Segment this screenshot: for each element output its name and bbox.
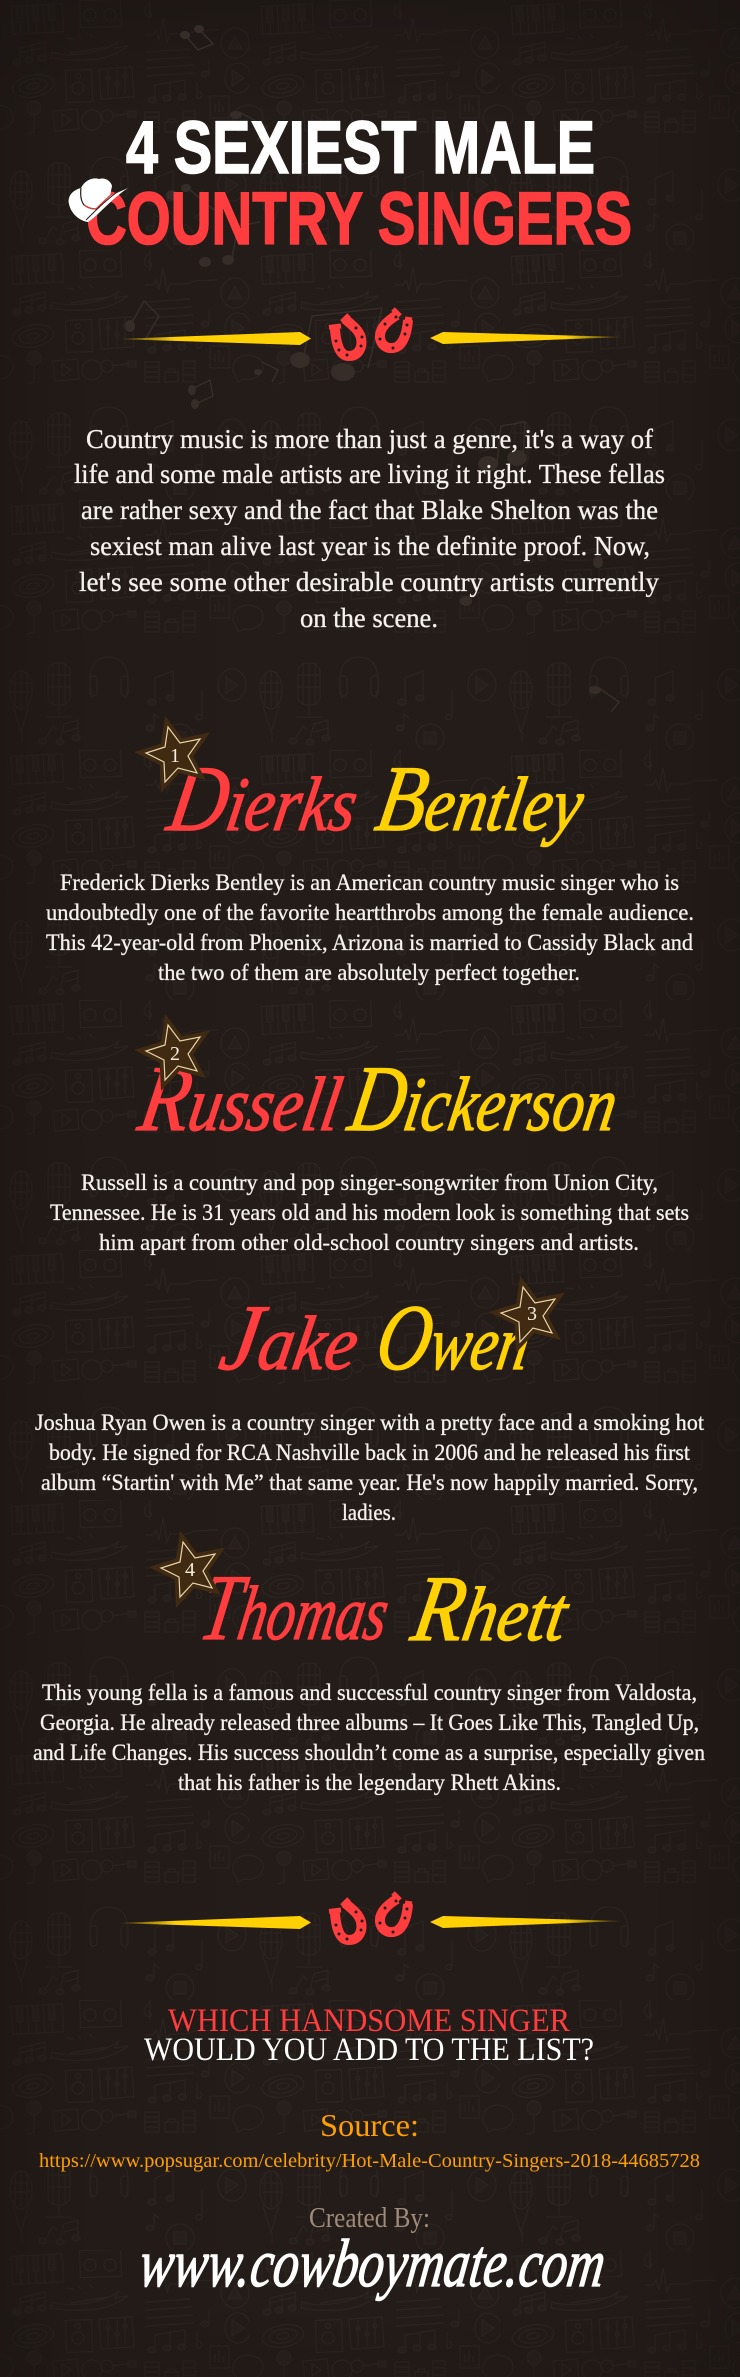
closing question: WOULD YOU ADD TO THE LIST? [144,2032,594,2068]
description: undoubtedly one of the favorite heartthrobs among the female audience. [46,900,694,925]
star badge 1: 1 [170,745,180,767]
created by label: Created By: [309,2202,430,2234]
description: the two of them are absolutely perfect together. [158,960,580,985]
intro paragraph: life and some male artists are living it right. These fellas [74,459,665,489]
star badge 3: 3 [527,1303,537,1325]
closing question [144,2003,594,2068]
panel: singer 1 Dierks Bentley [46,727,694,985]
description: body. He signed for RCA Nashville back in 2006 and he released his first [49,1440,691,1465]
star badge 4 [161,1542,215,1597]
icon: right horseshoe [378,309,412,350]
description [46,870,694,985]
floating faded music notes [125,25,619,712]
name: Russell Dickerson [131,1048,627,1151]
description: Joshua Ryan Owen is a country singer with a pretty face and a smoking hot [35,1410,705,1435]
name: Dierks Bentley: Dierks [160,748,367,851]
name: Jake Owen [213,1287,540,1390]
credit [135,2202,611,2301]
title [69,106,632,260]
right gold blade [430,332,623,344]
panel: singer 3 Jake Owen [35,1287,705,1525]
panel: singer 4 Thomas Rhett [33,1542,705,1795]
icon: cowboy hat [69,178,128,222]
star badge 2: 2 [170,1043,180,1065]
source [39,2107,700,2172]
closing question: WHICH HANDSOME SINGER [168,2003,570,2039]
description: album “Startin' with Me” that same year. He's now happily married. Sorry, [41,1470,698,1495]
divider: top horseshoes and gold blades [117,309,623,356]
description: that his father is the legendary Rhett Akins. [178,1770,561,1795]
name: Thomas Rhett: Rhett [404,1558,579,1661]
intro paragraph: sexiest man alive last year is the definite proof. Now, [90,531,650,561]
icon: left horseshoe [329,315,364,356]
name: Russell Dickerson: Russell [131,1048,351,1151]
description [50,1170,689,1255]
description: This 42-year-old from Phoenix, Arizona is married to Cassidy Black and [46,930,693,955]
name: Russell Dickerson: Dickerson [341,1048,627,1151]
description: Frederick Dierks Bentley is an American country music singer who is [60,870,679,895]
star badge 2 [146,1025,200,1080]
description: ladies. [342,1500,396,1525]
description [35,1410,705,1525]
intro paragraph: on the scene. [300,603,438,633]
name: Jake Owen: Owen [369,1287,540,1390]
name: Dierks Bentley [160,748,593,851]
name: Thomas Rhett: Thomas [193,1557,398,1660]
intro paragraph: are rather sexy and the fact that Blake Shelton was the [81,495,658,525]
intro paragraph [74,424,665,633]
name: Thomas Rhett [193,1557,579,1661]
divider: bottom horseshoes and gold blades [117,1893,623,1940]
description [33,1680,705,1795]
name: Jake Owen: Jake [213,1287,368,1390]
star badge 4: 4 [185,1559,195,1581]
description: This young fella is a famous and successful country singer from Valdosta, [42,1680,697,1705]
panel: singer 2 Russell Dickerson [50,1025,689,1255]
left gold blade [117,332,311,345]
description: Tennessee. He is 31 years old and his modern look is something that sets [50,1200,689,1225]
source: https://www.popsugar.com/celebrity/Hot-Male-Country-Singers-2018-44685728 [39,2150,700,2172]
intro paragraph: let's see some other desirable country artists currently [79,567,659,597]
source: Source: [320,2107,419,2143]
star badge 3 [501,1287,555,1342]
intro paragraph: Country music is more than just a genre, it's a way of [86,424,653,454]
description: Russell is a country and pop singer-songwriter from Union City, [81,1170,658,1195]
title line 1: 4 SEXIEST MALE [126,106,595,189]
star badge 1 [146,727,200,782]
description: Georgia. He already released three albums – It Goes Like This, Tangled Up, [40,1710,699,1735]
name: Dierks Bentley: Bentley [369,748,593,851]
description: him apart from other old-school country singers and artists. [99,1230,639,1255]
description: and Life Changes. His success shouldn’t come as a surprise, especially given [33,1740,705,1765]
